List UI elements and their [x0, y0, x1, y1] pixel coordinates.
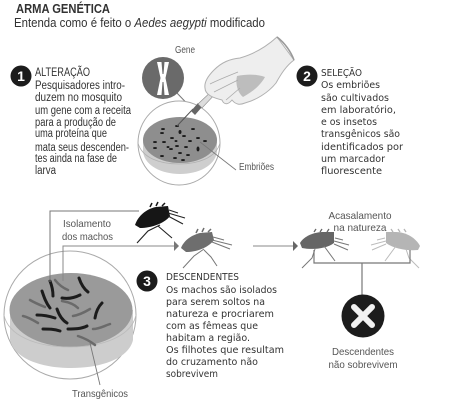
step 2 text: em laboratório, [321, 104, 396, 116]
step 3 text: DESCENDENTES [166, 272, 239, 283]
step 1 text [35, 66, 131, 177]
step 1 text: Pesquisadores intro- [35, 80, 125, 92]
icon: petri dish with embryos [138, 101, 220, 185]
transgênicos label and leader: Transgênicos [72, 388, 128, 400]
arrow: isolation grey male [63, 241, 179, 281]
subtitle: Entenda como é feito o Aedes aegypti modificado [14, 15, 265, 30]
step 1 text: tes ainda na fase de [35, 153, 117, 165]
isolation label: dos machos [62, 231, 113, 243]
step 3 badge: 3 [143, 273, 151, 289]
grey larvae [23, 280, 110, 345]
arrow to mating [253, 241, 298, 251]
embryos leader line and label: Embriões [239, 161, 274, 173]
icon: female mosquito in nature [371, 229, 420, 268]
icon: male mosquito in nature [300, 229, 349, 268]
mating label: Acasalamento [328, 210, 392, 222]
step 3 text: do cruzamento não [166, 357, 258, 368]
step 2 text: um marcador [321, 154, 386, 165]
step 1 text: ALTERAÇÃO [35, 66, 90, 79]
step 3 text [166, 272, 284, 380]
step 3 text: sobrevivem [166, 369, 218, 380]
dark larvae [37, 278, 102, 331]
step 3 text: natureza e procriarem [166, 309, 274, 320]
isolation label [62, 218, 113, 243]
step 1 text: uma proteína que [35, 128, 107, 140]
step 1 badge: 1 [17, 68, 25, 84]
icon: gene chromosome [142, 57, 198, 115]
step 2 badge [296, 66, 318, 86]
step 2 text: identificados por [321, 142, 404, 153]
mating bracket connector [314, 250, 410, 295]
step 2 text [321, 66, 404, 177]
step 3 text: com as fêmeas que [166, 320, 258, 332]
step 3 text: Os filhotes que resultam [166, 345, 284, 356]
offspring label: não sobrevivem [328, 359, 398, 371]
step 2 text: fluorescente [321, 166, 382, 177]
isolation label: Isolamento [63, 218, 111, 230]
gene label: Gene [175, 44, 195, 56]
embryos leader line and label [200, 142, 274, 173]
title: ARMA GENÉTICA [16, 1, 110, 16]
large petri dish with larvae [4, 251, 136, 379]
mating label: na natureza [334, 222, 387, 234]
step 2 text: SELEÇÃO [321, 66, 362, 79]
step 1 text: duzem no mosquito [35, 92, 122, 104]
step 3 badge [136, 270, 158, 292]
icon: grey mosquito [181, 228, 232, 268]
step 3 text: para serem soltos na [166, 297, 265, 308]
step 2 badge: 2 [303, 68, 311, 84]
step 2 text: são cultivados [321, 93, 389, 104]
step 3 text: habitam a região. [166, 333, 250, 344]
step 1 text: larva [35, 165, 56, 177]
icon: black mosquito [135, 202, 185, 243]
arrow: isolation black male [50, 211, 139, 282]
icon: syringe and gloved hand [177, 37, 294, 126]
step 1 badge [10, 66, 32, 86]
step 3 text: Os machos são isolados [166, 285, 277, 296]
step 2 text: Os embriões [321, 80, 380, 91]
offspring label [328, 346, 398, 371]
step 1 text: mata seus descenden- [35, 142, 129, 154]
embryos [153, 125, 207, 161]
step 2 text: transgênicos são [321, 128, 400, 140]
mating label [328, 210, 392, 234]
step 1 text: para a produção de [35, 117, 116, 129]
offspring label: Descendentes [332, 346, 394, 358]
transgênicos label and leader [72, 343, 128, 400]
step 1 text: um gene com a receita [35, 105, 131, 117]
icon: X circle [342, 294, 384, 338]
step 2 text: e os insetos [321, 117, 377, 128]
